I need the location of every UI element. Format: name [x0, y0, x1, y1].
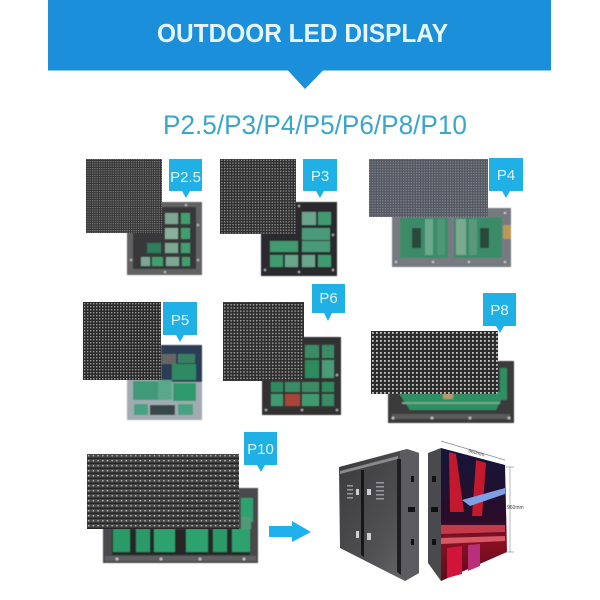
LED face [86, 159, 162, 233]
label [489, 158, 523, 198]
label: P10 [247, 441, 274, 458]
LED face [87, 454, 239, 529]
label: P6 [319, 290, 338, 307]
module: P3 [220, 159, 337, 276]
module: P5 [83, 302, 202, 420]
screen image [441, 448, 507, 581]
dimension: height: 960mm [507, 505, 524, 511]
LED face [369, 159, 488, 217]
label: P8 [490, 302, 509, 319]
LED face [371, 331, 498, 394]
label [483, 293, 516, 333]
label: P5 [171, 312, 189, 329]
dimension: width: 960mm [467, 448, 485, 459]
label: P3 [311, 168, 329, 185]
title: OUTDOOR LED DISPLAY [157, 20, 448, 48]
arrow [269, 521, 311, 542]
cabinet: LED screen side [428, 441, 524, 581]
module: P4 [369, 158, 523, 267]
label: P4 [497, 167, 515, 184]
module: P8 [371, 293, 516, 423]
module: P6 [223, 284, 345, 415]
LED face [223, 302, 304, 381]
label [244, 432, 277, 472]
LED face [220, 159, 296, 234]
label: P2.5 [170, 169, 201, 186]
subtitle: P2.5/P3/P4/P5/P6/P8/P10 [163, 110, 467, 140]
module: P10 [87, 432, 277, 563]
module: P2.5 [86, 159, 202, 275]
LED face [83, 302, 161, 380]
header banner [48, 0, 551, 89]
cabinet: rear doors [339, 449, 419, 581]
